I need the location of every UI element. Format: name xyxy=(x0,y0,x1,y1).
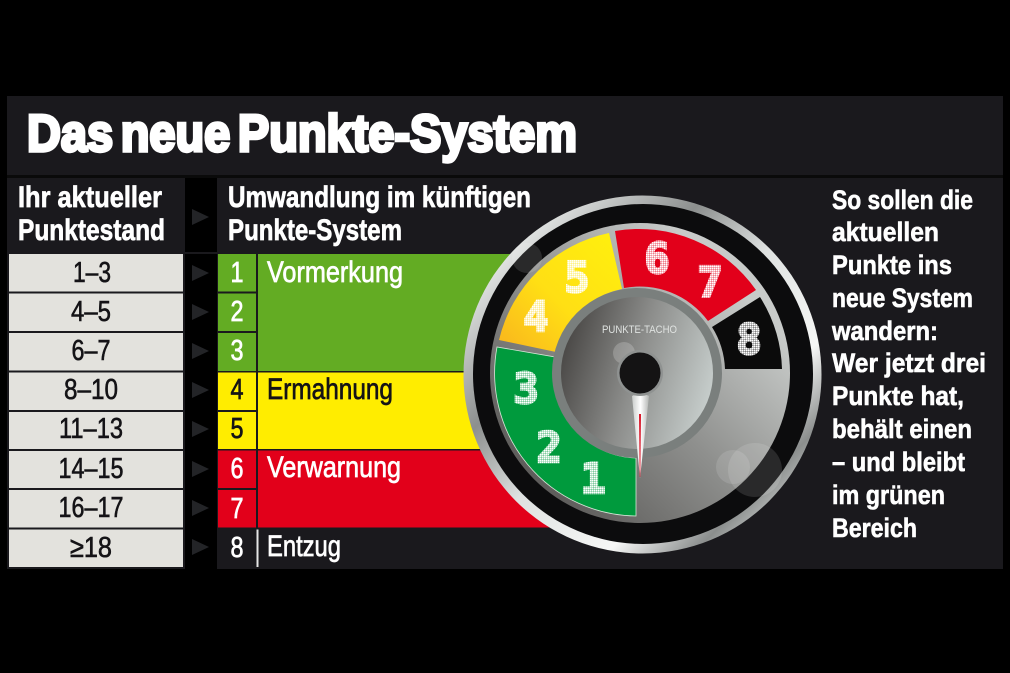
current points rows: ≥18 xyxy=(70,532,112,564)
digits: 1 xyxy=(580,454,606,503)
digits: 2 xyxy=(536,423,562,472)
segment red 6-7 xyxy=(615,229,756,321)
divider under title xyxy=(7,175,1003,178)
current points rows: 8–10 xyxy=(64,374,118,406)
black ring xyxy=(473,204,813,544)
segment black 8 xyxy=(712,297,782,369)
green band: Vormerkung: 3 xyxy=(230,335,244,367)
disc label: PUNKTE-TACHO xyxy=(602,324,677,336)
yellow band: Ermahnung: 4 xyxy=(230,374,244,406)
black row: Entzug xyxy=(230,530,341,567)
explanatory text: Punkte ins xyxy=(832,250,952,280)
bokeh highlights xyxy=(512,243,782,497)
explanatory text: – und bleibt xyxy=(832,447,965,477)
gauge: Punkte-Tacho xyxy=(464,196,822,554)
current points rows: 1–3 xyxy=(73,257,111,289)
hub highlight xyxy=(613,342,635,364)
explanatory text: wandern: xyxy=(831,316,938,346)
segment yellow 4-5 xyxy=(499,233,622,352)
chrome bezel xyxy=(464,196,822,554)
explanatory text: neue System xyxy=(832,283,973,313)
yellow band: Ermahnung: 5 xyxy=(230,413,244,445)
current points rows: 6–7 xyxy=(72,335,110,367)
column heading: current points xyxy=(18,181,165,247)
green band: Vormerkung: 2 xyxy=(230,296,244,328)
column heading: current points: Punktestand xyxy=(18,214,165,247)
digits: 5 xyxy=(564,253,590,302)
column heading: conversion xyxy=(228,181,531,247)
column heading: conversion: Punkte-System xyxy=(228,214,402,247)
red band: Verwarnung: 6 xyxy=(230,453,244,485)
yellow band: Ermahnung: Ermahnung xyxy=(267,373,393,406)
green band: Vormerkung: 1 xyxy=(230,257,244,289)
digits: 3 xyxy=(513,364,539,413)
red band: Verwarnung: Verwarnung xyxy=(267,451,401,484)
explanatory text: Wer jetzt drei xyxy=(832,348,986,378)
title: Das neue Punkte-System xyxy=(27,105,577,163)
explanatory text xyxy=(831,185,986,543)
explanatory text: behält einen xyxy=(832,414,972,444)
digits: 8 xyxy=(736,315,762,364)
current points rows: 11–13 xyxy=(59,413,123,445)
hub xyxy=(617,350,663,396)
column heading: conversion: Umwandlung im künftigen xyxy=(228,181,531,214)
explanatory text: Bereich xyxy=(832,513,917,543)
dial face xyxy=(490,223,790,523)
center disc xyxy=(552,288,722,458)
yellow band: Ermahnung xyxy=(218,372,558,449)
arrow column xyxy=(185,178,217,569)
explanatory text: aktuellen xyxy=(832,217,939,247)
digits: 4 xyxy=(523,292,549,341)
current points rows xyxy=(9,254,183,567)
digits xyxy=(513,234,762,503)
digits: 6 xyxy=(644,234,670,283)
explanatory text: im grünen xyxy=(832,480,945,510)
red band: Verwarnung: 7 xyxy=(230,493,244,525)
current points rows: 4–5 xyxy=(71,296,111,328)
black row: Entzug: 8 xyxy=(230,532,244,564)
black row: Entzug: Entzug xyxy=(267,530,341,563)
column heading: current points: Ihr aktueller xyxy=(18,181,162,214)
red band: Verwarnung xyxy=(218,450,558,528)
green band: Vormerkung xyxy=(218,254,558,371)
current points rows: 16–17 xyxy=(58,492,124,524)
needle xyxy=(632,394,649,478)
explanatory text: Punkte hat, xyxy=(832,381,964,411)
digits: 7 xyxy=(697,258,723,307)
explanatory text: So sollen die xyxy=(832,185,973,215)
segment green 1-3 xyxy=(495,347,636,516)
green band: Vormerkung: Vormerkung xyxy=(267,256,403,289)
main panel background xyxy=(7,96,1003,569)
current points rows: 14–15 xyxy=(58,453,124,485)
